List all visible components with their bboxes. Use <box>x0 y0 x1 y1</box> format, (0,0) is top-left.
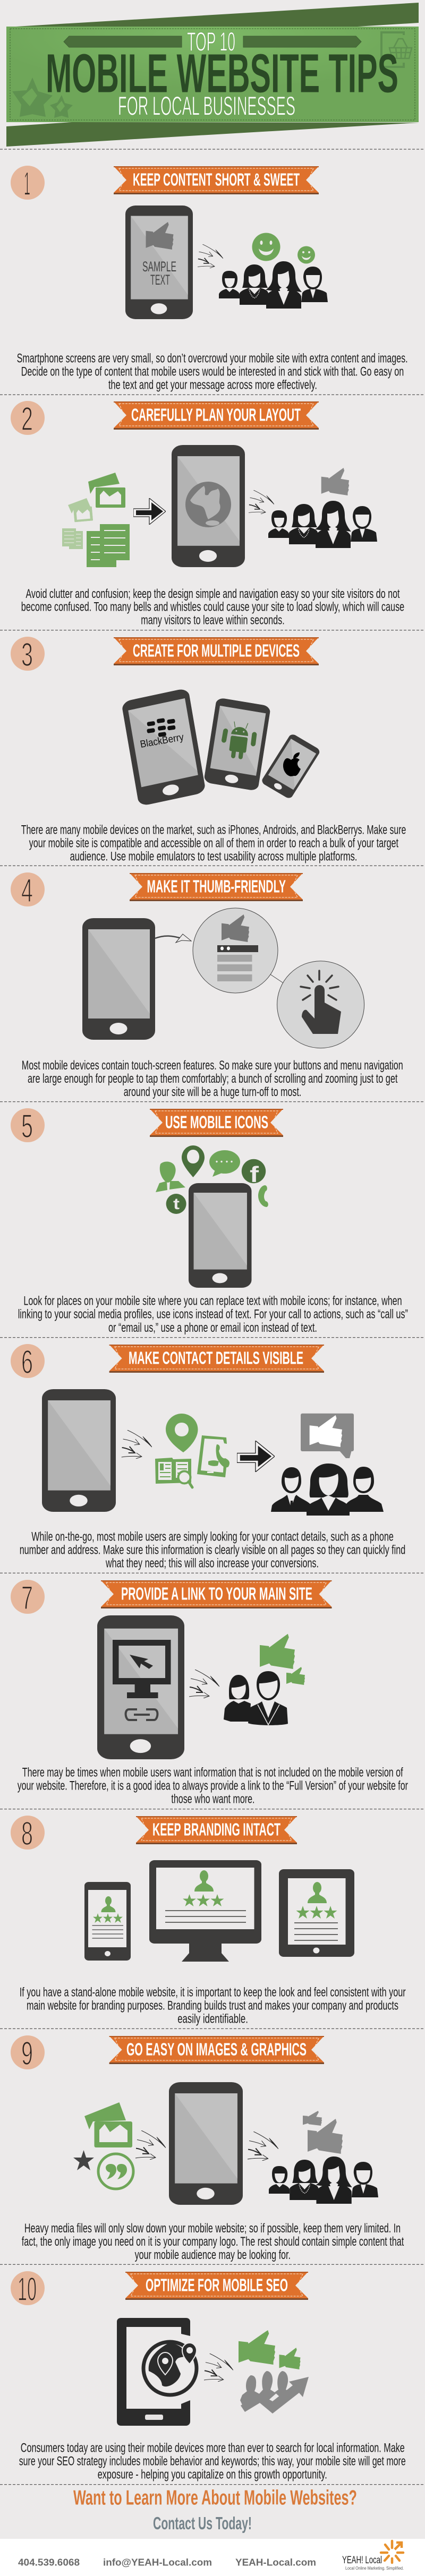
icon: thumbs up <box>222 914 249 942</box>
body text 2 <box>21 587 404 628</box>
sketch arrow <box>237 1441 275 1472</box>
logo wordmark: YEAH! Local <box>342 2555 382 2566</box>
number badge 8: 8 <box>21 1816 33 1852</box>
footer <box>0 2539 425 2576</box>
number badge 6 <box>11 1344 45 1381</box>
phone: iphone <box>260 733 321 800</box>
phone: android <box>203 697 271 791</box>
number badge 9 <box>11 2035 45 2072</box>
icon: green thumbs <box>260 1634 305 1685</box>
ribbon heading 6 <box>109 1345 324 1373</box>
body text 4: around your site will be a huge turn-off to most. <box>124 1085 301 1099</box>
bubble: menu <box>193 908 278 993</box>
section 4 <box>11 872 403 1099</box>
body text 5: or “email us,” use a phone or email icon instead of text. <box>108 1321 317 1335</box>
icon: images and documents <box>62 473 130 567</box>
ribbon heading 10: OPTIMIZE FOR MOBILE SEO <box>146 2275 288 2295</box>
icon: map pin <box>166 1414 198 1452</box>
device: tablet <box>279 1869 354 1957</box>
icon: blackberry logo <box>146 717 177 739</box>
section 5 <box>11 1108 408 1335</box>
icon: globe <box>185 482 231 527</box>
section 3 <box>11 637 406 864</box>
icon: apple logo <box>283 752 301 776</box>
arrows <box>204 2354 233 2382</box>
body text 8: easily identifiable. <box>177 2012 248 2026</box>
body text 6 <box>20 1530 405 1571</box>
number badge 1: 1 <box>24 166 30 202</box>
website: YEAH-Local.com <box>235 2557 316 2568</box>
icon: globe with pins <box>143 2342 197 2395</box>
body text 4 <box>22 1058 403 1099</box>
body text 7: those who want more. <box>171 1792 255 1807</box>
icon: quote circle <box>98 2154 133 2189</box>
icon: facebook: f <box>250 1162 259 1187</box>
phone <box>169 2082 243 2205</box>
ribbon heading 4 <box>130 873 303 901</box>
ribbon heading 9 <box>109 2036 324 2064</box>
body text 3 <box>21 823 406 864</box>
icon: chain link <box>126 1709 157 1720</box>
number badge 7 <box>11 1580 45 1616</box>
number badge 2 <box>11 401 45 438</box>
number badge 7: 7 <box>21 1580 33 1616</box>
device: monitor <box>149 1860 261 1962</box>
logo <box>342 2541 404 2571</box>
arrows <box>122 1430 152 1459</box>
icon: handset <box>258 1185 268 1207</box>
banner panel <box>6 27 419 122</box>
device: phone <box>84 1882 131 1961</box>
customers <box>224 1671 288 1725</box>
number badge 4 <box>11 872 45 909</box>
number badge 9: 9 <box>21 2035 33 2072</box>
icon: map pin <box>182 1145 205 1177</box>
section 2 <box>11 401 404 628</box>
body text 10 <box>19 2441 406 2482</box>
ribbon heading 6: MAKE CONTACT DETAILS VISIBLE <box>129 1348 303 1367</box>
ribbon heading 9: GO EASY ON IMAGES & GRAPHICS <box>126 2039 307 2059</box>
number badge 3: 3 <box>21 637 33 673</box>
icon: facebook <box>242 1159 266 1187</box>
phone: blackberry <box>121 688 206 807</box>
curved arrow <box>155 934 191 943</box>
phone with sample text <box>125 206 193 319</box>
number badge 8 <box>11 1816 45 1852</box>
icon: monitor with cursor <box>113 1640 171 1698</box>
body text 7 <box>18 1766 408 1807</box>
ribbon heading 3: CREATE FOR MULTIPLE DEVICES <box>133 640 300 660</box>
ribbon band top <box>16 3 419 28</box>
icon: person <box>156 1162 185 1192</box>
number badge 10: 10 <box>18 2271 37 2308</box>
arrows <box>248 2132 278 2161</box>
ribbon heading 5 <box>150 1109 283 1137</box>
logo burst <box>381 2541 403 2563</box>
arrows <box>189 1670 219 1698</box>
phone <box>42 1389 116 1512</box>
ribbon heading 8 <box>136 1816 297 1844</box>
section 8 <box>11 1816 406 2026</box>
number badge 2: 2 <box>21 401 33 438</box>
ribbon heading 3 <box>114 637 319 665</box>
icon: tumblr <box>166 1194 186 1214</box>
number badge 4: 4 <box>21 872 33 909</box>
body text 6: what they need; this will also increase your conversions. <box>105 1556 319 1571</box>
icon: thumbs up pair <box>303 2111 343 2154</box>
body text 1 <box>17 352 408 392</box>
icon: stars watermark <box>12 78 73 118</box>
audience <box>269 2156 378 2204</box>
icon: tablet with handset <box>197 1435 230 1477</box>
menu bars <box>217 945 258 981</box>
body text 9 <box>22 2221 404 2262</box>
body text 1: the text and get your message across more effectively. <box>108 378 317 392</box>
section 1 <box>11 166 408 392</box>
section 10 <box>11 2271 406 2482</box>
ribbon heading 10 <box>125 2272 308 2300</box>
number badge 5 <box>11 1108 45 1145</box>
number badge 1 <box>11 166 45 202</box>
ribbon heading 4: MAKE IT THUMB-FRIENDLY <box>147 876 286 896</box>
email: info@YEAH-Local.com <box>103 2557 212 2568</box>
body text 9: your mobile audience may be looking for. <box>135 2248 291 2262</box>
heading: top 10: TOP 10 <box>187 27 235 57</box>
body text 8 <box>20 1986 406 2026</box>
icon: android logo <box>219 720 258 761</box>
audience <box>219 261 328 309</box>
audience <box>268 501 377 548</box>
phone number: 404.539.6068 <box>18 2557 80 2568</box>
ribbon heading 1: KEEP CONTENT SHORT & SWEET <box>133 169 300 189</box>
icon: green thumbs <box>239 2330 301 2369</box>
arrows <box>135 2130 166 2160</box>
icon: address book and magnifier <box>155 1458 192 1487</box>
ribbon heading 2 <box>114 401 319 430</box>
section 9 <box>11 2035 404 2262</box>
icon: tumblr: t <box>173 1195 180 1213</box>
icon: star <box>73 2150 94 2170</box>
small ribbon left <box>64 36 182 47</box>
number badge 3 <box>11 637 45 673</box>
icon: images <box>84 2102 132 2147</box>
bubble: tap <box>277 961 364 1048</box>
ribbon band bottom <box>6 122 419 147</box>
blackberry wordmark: BlackBerry <box>139 732 185 750</box>
small ribbon right <box>243 36 361 47</box>
icon: growth people and arrow <box>240 2371 309 2414</box>
title banner <box>6 3 419 147</box>
ribbon heading 5: USE MOBILE ICONS <box>165 1112 268 1132</box>
connector <box>270 974 283 983</box>
icon: thumbs up speech bubble <box>301 1414 354 1458</box>
ribbon heading 2: CAREFULLY PLAN YOUR LAYOUT <box>131 405 301 424</box>
ribbon heading 8: KEEP BRANDING INTACT <box>152 1819 280 1839</box>
phone <box>189 1183 252 1288</box>
arrows <box>198 244 223 268</box>
section 6 <box>11 1344 405 1571</box>
phone <box>82 918 155 1040</box>
sketch arrow <box>133 498 166 525</box>
sample text: SAMPLE <box>142 259 176 275</box>
phone outline with globe <box>117 2318 197 2426</box>
ribbon heading 1 <box>114 166 319 194</box>
icon: thumbs up <box>321 468 349 495</box>
body text 2: many visitors to leave within seconds. <box>141 613 285 628</box>
body text 5 <box>18 1294 408 1335</box>
customers <box>271 1464 384 1516</box>
icon: thumbs up <box>146 222 173 250</box>
call to action subheading: Contact Us Today! <box>153 2513 252 2533</box>
phone with sample text: TEXT <box>150 272 170 288</box>
phone with monitor and link <box>97 1615 184 1759</box>
arrows <box>249 490 274 514</box>
icon: chat bubble <box>209 1150 240 1177</box>
number badge 10 <box>11 2271 45 2308</box>
ribbon heading 7 <box>101 1580 332 1608</box>
phone with globe <box>172 445 245 567</box>
icon: phone basket watermark <box>381 32 412 67</box>
number badge 5: 5 <box>21 1108 33 1145</box>
icon: tapping hand <box>301 971 341 1034</box>
logo tagline: Local Online Marketing. Simplified. <box>345 2566 404 2571</box>
icon: smileys <box>252 233 315 263</box>
number badge 6: 6 <box>21 1344 33 1381</box>
section 7 <box>11 1580 408 1807</box>
